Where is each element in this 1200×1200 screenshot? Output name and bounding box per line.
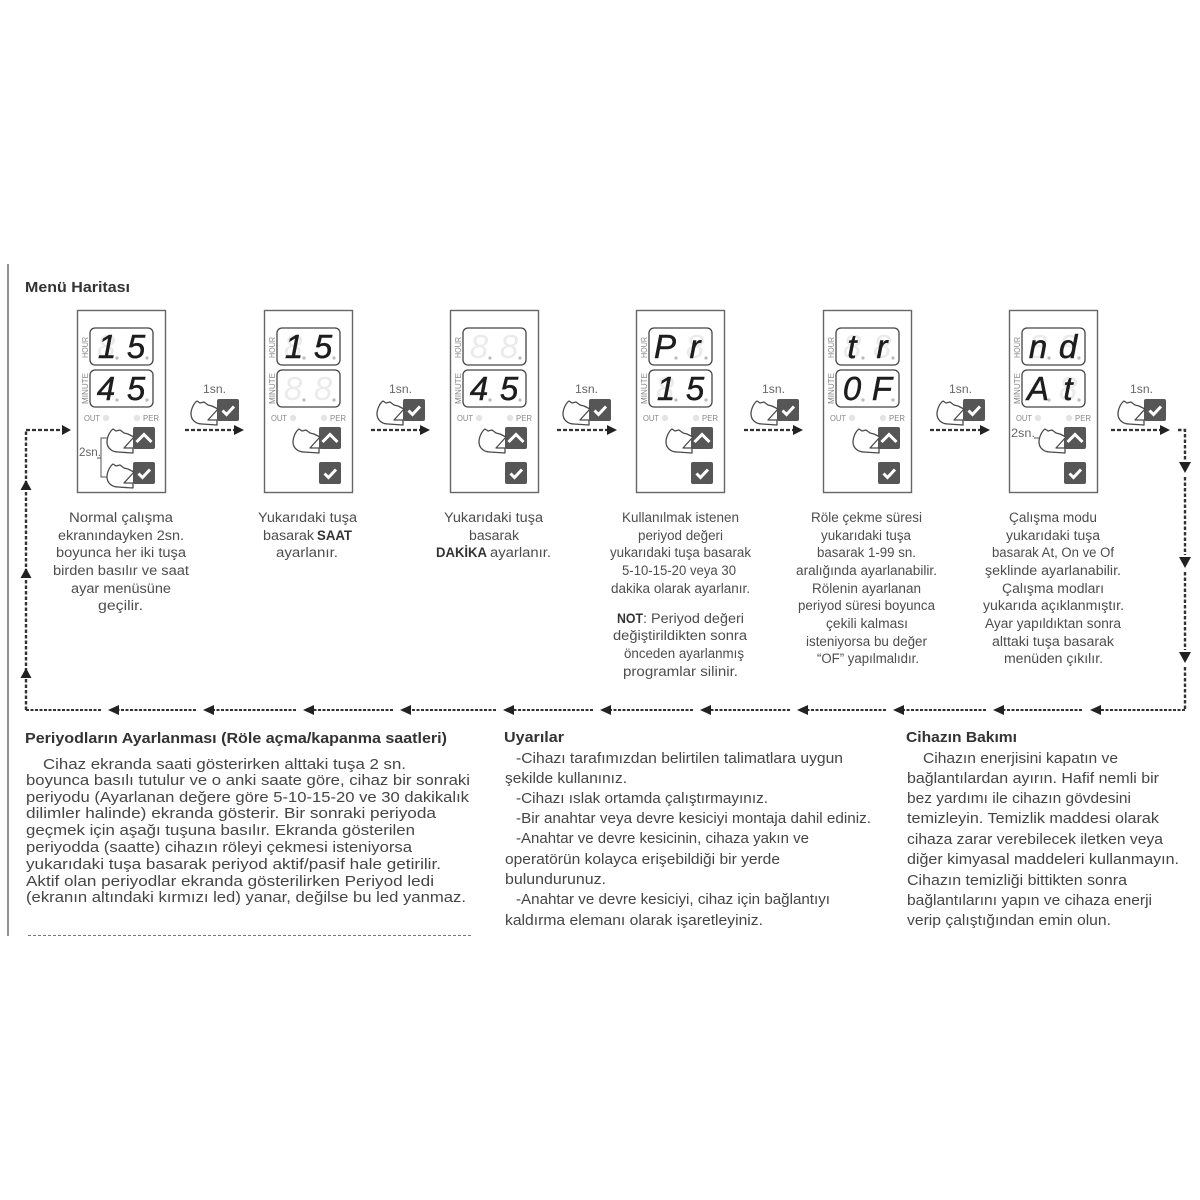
panel: device 4 period setting: HOUR: [640, 337, 649, 358]
arrow: step 5 to 6 with button icon: 1sn.: [949, 384, 972, 396]
arrow: step 2 to 3 with button icon: [371, 384, 430, 435]
text block: caption step 6: şeklinde ayarlanabilir.: [985, 563, 1121, 578]
panel: device 1 normal screen: HOUR: [81, 337, 90, 358]
panel: Cihazın Bakımı: Cihazın temizliği bittikten sonra: [907, 872, 1128, 889]
panel: device 5 relay time setting: OUT: [830, 414, 846, 423]
panel: device 2 hour setting: OUT: [271, 414, 287, 423]
panel: Uyarılar: [504, 729, 871, 929]
panel: Uyarılar: -Anahtar ve devre kesicinin, cihaza yakın ve: [516, 830, 809, 847]
panel: Cihazın Bakımı: Cihazın enerjisini kapatın ve: [923, 750, 1118, 767]
panel: Cihazın Bakımı: temizleyin. Temizlik maddesi olarak: [907, 810, 1160, 827]
text block: caption step 5: Rölenin ayarlanan: [812, 581, 921, 596]
panel: Uyarılar: Uyarılar: [504, 729, 564, 746]
panel: device 2 hour setting: 8: [314, 370, 333, 407]
text block: caption step 1: boyunca her iki tuşa: [56, 545, 187, 560]
panel: device 3 minute setting: PER: [516, 414, 532, 423]
text block: caption step 1: geçilir.: [98, 598, 143, 613]
text block: caption step 6: yukarıdaki tuşa: [1006, 528, 1101, 543]
text block: caption step 4 with note: NOT: [617, 611, 644, 626]
panel: Periyodların Ayarlanması: dilimler halinde) ekranda gösterir. Bir sonraki periyoda: [26, 805, 437, 822]
panel: Periyodların Ayarlanması: Periyodların Ayarlanması (Röle açma/kapanma saatleri): [25, 730, 447, 747]
panel: device 2 hour setting: MINUTE: [268, 373, 277, 404]
panel: device 4 period setting: 1: [657, 370, 675, 407]
panel: Periyodların Ayarlanması: boyunca basılı tutulur ve o anki saate göre, cihaz bir sonraki: [26, 772, 470, 789]
panel: device 3 minute setting: [450, 310, 538, 492]
panel: Cihazın Bakımı: Cihazın Bakımı: [906, 729, 1017, 746]
panel: Cihazın Bakımı: bağlantılardan ayırın. Hafif nemli bir: [907, 770, 1159, 787]
panel: device 1 normal screen: 1: [98, 328, 116, 365]
text block: caption step 5: isteniyorsa bu değer: [806, 634, 927, 649]
text block: caption step 6: menüden çıkılır.: [1004, 651, 1103, 666]
panel: device 6 working mode setting: d: [1059, 328, 1079, 365]
text block: caption step 6: Çalışma modu: [1009, 510, 1097, 525]
arrow: right side descending path: [1178, 430, 1191, 710]
panel: device 6 working mode setting: A: [1025, 370, 1049, 407]
panel: device 2 hour setting: [264, 310, 352, 492]
panel: device 5 relay time setting: r: [876, 328, 890, 365]
text block: caption step 2: Yukarıdaki tuşa: [258, 510, 358, 525]
panel: device 6 working mode setting: 8: [1059, 370, 1078, 407]
arrow: step 6 exit with button icon: 1sn.: [1130, 384, 1153, 396]
panel: Uyarılar: -Cihazı tarafımızdan belirtilen talimatlara uygun: [516, 750, 843, 767]
panel: Uyarılar: -Cihazı ıslak ortamda çalıştırmayınız.: [516, 790, 768, 807]
arrow: step 1 to 2 with button icon: 1sn.: [203, 384, 226, 396]
panel: Cihazın Bakımı: verip çalıştığından emin olun.: [907, 912, 1111, 929]
text block: caption step 2: [258, 510, 358, 560]
text block: caption step 5: aralığında ayarlanabilir.: [796, 563, 937, 578]
panel: Cihazın Bakımı: bez yardımı ile cihazın gövdesini: [907, 790, 1131, 807]
text block: caption step 2: basarak: [263, 528, 314, 543]
panel: device 3 minute setting: 8: [470, 328, 489, 365]
panel: device 5 relay time setting: 0: [843, 370, 862, 407]
text block: caption step 1: [53, 510, 189, 613]
arrow: step 4 to 5 with button icon: 1sn.: [762, 384, 785, 396]
text block: caption step 4 with note: periyod değeri: [638, 528, 723, 543]
panel: device 4 period setting: 8: [656, 370, 675, 407]
arrow: step 2 to 3 with button icon: 1sn.: [389, 384, 412, 396]
text block: caption step 6: yukarıda açıklanmıştır.: [983, 598, 1124, 613]
panel: Uyarılar: şekilde kullanınız.: [505, 770, 627, 787]
panel: Periyodların Ayarlanması: geçmek için aşağı tuşuna basılır. Ekranda gösterilen: [26, 822, 415, 839]
panel: device 1 normal screen: OUT: [84, 414, 100, 423]
panel: Periyodların Ayarlanması: periyodu (Ayarlanan değere göre 5-10-15-20 ve 30 dakikalık: [26, 789, 470, 806]
arrow: step 1 to 2 with button icon: [185, 384, 244, 435]
text block: caption step 1: birden basılır ve saat: [53, 563, 189, 578]
panel: Uyarılar: operatörün kolayca erişebildiği bir yerde: [505, 851, 780, 868]
left margin rule: [7, 264, 9, 936]
text block: caption step 5: çekili kalması: [826, 616, 908, 631]
panel: device 1 normal screen: MINUTE: [81, 373, 90, 404]
title: Menü Haritası: Menü Haritası: [25, 279, 130, 296]
panel: device 6 working mode setting: OUT: [1016, 414, 1032, 423]
panel: device 2 hour setting: HOUR: [268, 337, 277, 358]
panel: device 2 hour setting: 1: [285, 328, 303, 365]
panel: device 4 period setting: P: [654, 328, 676, 365]
panel: device 1 normal screen: 4: [97, 370, 115, 407]
panel: Cihazın Bakımı: bağlantılarını yapın ve cihaza enerji: [907, 892, 1152, 909]
text block: caption step 4 with note: yukarıdaki tuşa basarak: [610, 545, 751, 560]
text block: caption step 4 with note: dakika olarak ayarlanır.: [611, 581, 750, 596]
arrow: step 3 to 4 with button icon: [557, 384, 617, 435]
panel: Cihazın Bakımı: [906, 729, 1179, 929]
panel: device 4 period setting: [636, 310, 724, 492]
text block: caption step 3: Yukarıdaki tuşa: [444, 510, 544, 525]
bottom dashed rule: [28, 934, 471, 936]
text block: caption step 6: basarak At, On ve Of: [992, 545, 1114, 560]
panel: device 6 working mode setting: 8: [1059, 328, 1078, 365]
arrow: bottom return path: [26, 705, 1185, 715]
panel: device 5 relay time setting: PER: [889, 414, 905, 423]
panel: Periyodların Ayarlanması: Aktif olan periyodlar ekranda gösterilirken Periyod ledi: [26, 873, 434, 890]
arrow: step 6 exit with button icon: [1111, 384, 1170, 435]
panel: device 2 hour setting: 8: [284, 328, 303, 365]
text block: caption step 4 with note: [610, 510, 751, 679]
panel: device 5 relay time setting: 8: [873, 328, 892, 365]
panel: device 4 period setting: OUT: [643, 414, 659, 423]
text block: caption step 3: basarak: [469, 528, 519, 543]
panel: device 1 normal screen: 5: [127, 328, 146, 365]
panel: device 4 period setting: PER: [702, 414, 718, 423]
panel: Uyarılar: bulundurunuz.: [505, 871, 606, 888]
panel: device 5 relay time setting: [824, 310, 912, 492]
text block: caption step 1: Normal çalışma: [69, 510, 174, 525]
panel: device 6 working mode setting: MINUTE: [1013, 373, 1022, 404]
panel: device 6 working mode setting: PER: [1075, 414, 1091, 423]
arrow: step 5 to 6 with button icon: [930, 384, 990, 435]
text block: caption step 4 with note: programlar silinir.: [623, 664, 738, 679]
text block: caption step 5: “OF” yapılmalıdır.: [817, 651, 919, 666]
text block: caption step 3: DAKİKA: [436, 545, 487, 560]
text block: caption step 5: Röle çekme süresi: [811, 510, 922, 525]
arrow: step 4 to 5 with button icon: [744, 384, 803, 435]
panel: device 4 period setting: MINUTE: [640, 373, 649, 404]
panel: device 6 working mode setting: [1010, 310, 1098, 492]
panel: device 3 minute setting: 4: [470, 370, 488, 407]
panel: device 4 period setting: 5: [686, 370, 705, 407]
panel: device 1 normal screen: PER: [143, 414, 159, 423]
panel: device 3 minute setting: 5: [500, 370, 519, 407]
panel: device 5 relay time setting: F: [872, 370, 894, 407]
panel: device 1 normal screen: 2sn.: [79, 447, 101, 459]
panel: device 2 hour setting: 5: [314, 328, 333, 365]
panel: device 6 working mode setting: 2sn.: [1011, 428, 1035, 440]
panel: device 6 working mode setting: n: [1029, 328, 1047, 365]
text block: caption step 5: [796, 510, 937, 666]
text block: caption step 3: ayarlanır.: [490, 545, 551, 560]
arrow: step 3 to 4 with button icon: 1sn.: [575, 384, 598, 396]
panel: Periyodların Ayarlanması: [25, 730, 470, 906]
panel: Uyarılar: kaldırma elemanı olarak işaretleyiniz.: [505, 912, 763, 929]
text block: caption step 6: [983, 510, 1124, 666]
text block: caption step 4 with note: 5-10-15-20 veya 30: [622, 563, 736, 578]
text block: caption step 2: ayarlanır.: [276, 545, 338, 560]
text block: caption step 3: [436, 510, 551, 560]
text block: caption step 5: basarak 1-99 sn.: [817, 545, 916, 560]
panel: device 6 working mode setting: 8: [1029, 328, 1048, 365]
text block: caption step 2: SAAT: [317, 528, 353, 543]
text block: caption step 5: periyod süresi boyunca: [798, 598, 935, 613]
panel: device 4 period setting: r: [690, 328, 702, 365]
panel: device 1 normal screen: 5: [127, 370, 146, 407]
panel: device 1 normal screen: [78, 310, 166, 492]
text block: caption step 1: ayar menüsüne: [71, 581, 171, 596]
panel: device 5 relay time setting: t: [847, 328, 858, 365]
panel: Periyodların Ayarlanması: periyodda (saatte) cihazın röleyi çekmesi isteniyorsa: [26, 839, 413, 856]
panel: device 2 hour setting: PER: [330, 414, 346, 423]
panel: device 3 minute setting: 8: [500, 328, 519, 365]
panel: device 3 minute setting: OUT: [457, 414, 473, 423]
panel: device 5 relay time setting: HOUR: [827, 337, 836, 358]
panel: device 4 period setting: 8: [686, 328, 705, 365]
text block: caption step 6: Ayar yapıldıktan sonra: [985, 616, 1121, 631]
text block: caption step 6: alttaki tuşa basarak: [992, 634, 1114, 649]
panel: Uyarılar: -Bir anahtar veya devre kesiciyi montaja dahil ediniz.: [516, 810, 871, 827]
text block: caption step 4 with note: değiştirildikten sonra: [613, 628, 748, 643]
panel: Cihazın Bakımı: diğer kimyasal maddeleri kullanmayın.: [907, 851, 1179, 868]
arrow: entry into device 1: [26, 425, 71, 435]
panel: Periyodların Ayarlanması: yukarıdaki tuşa basarak periyod aktif/pasif hale getirilir.: [26, 856, 441, 873]
panel: device 2 hour setting: 8: [284, 370, 303, 407]
text block: caption step 1: ekranındayken 2sn.: [58, 528, 184, 543]
text block: caption step 4 with note: : Periyod değeri: [643, 611, 744, 626]
panel: device 1 normal screen: 8: [97, 328, 116, 365]
text block: caption step 4 with note: önceden ayarlanmış: [624, 646, 744, 661]
panel: device 3 minute setting: HOUR: [454, 337, 463, 358]
panel: device 6 working mode setting: t: [1063, 370, 1074, 407]
panel: Cihazın Bakımı: cihaza zarar verebilecek iletken veya: [907, 831, 1164, 848]
arrow: left side ascending path: [20, 430, 32, 710]
text block: caption step 5: yukarıdaki tuşa: [821, 528, 911, 543]
panel: Periyodların Ayarlanması: (ekranın altındaki kırmızı led) yanar, değilse bu led yanmaz.: [26, 889, 466, 906]
panel: device 5 relay time setting: MINUTE: [827, 373, 836, 404]
text block: caption step 6: Çalışma modları: [1002, 581, 1104, 596]
panel: Uyarılar: -Anahtar ve devre kesiciyi, cihaz için bağlantıyı: [516, 891, 830, 908]
text block: caption step 4 with note: Kullanılmak istenen: [622, 510, 739, 525]
panel: device 5 relay time setting: 8: [843, 328, 862, 365]
panel: device 6 working mode setting: HOUR: [1013, 337, 1022, 358]
panel: Periyodların Ayarlanması: Cihaz ekranda saati gösterirken alttaki tuşa 2 sn.: [43, 756, 406, 773]
panel: device 3 minute setting: MINUTE: [454, 373, 463, 404]
